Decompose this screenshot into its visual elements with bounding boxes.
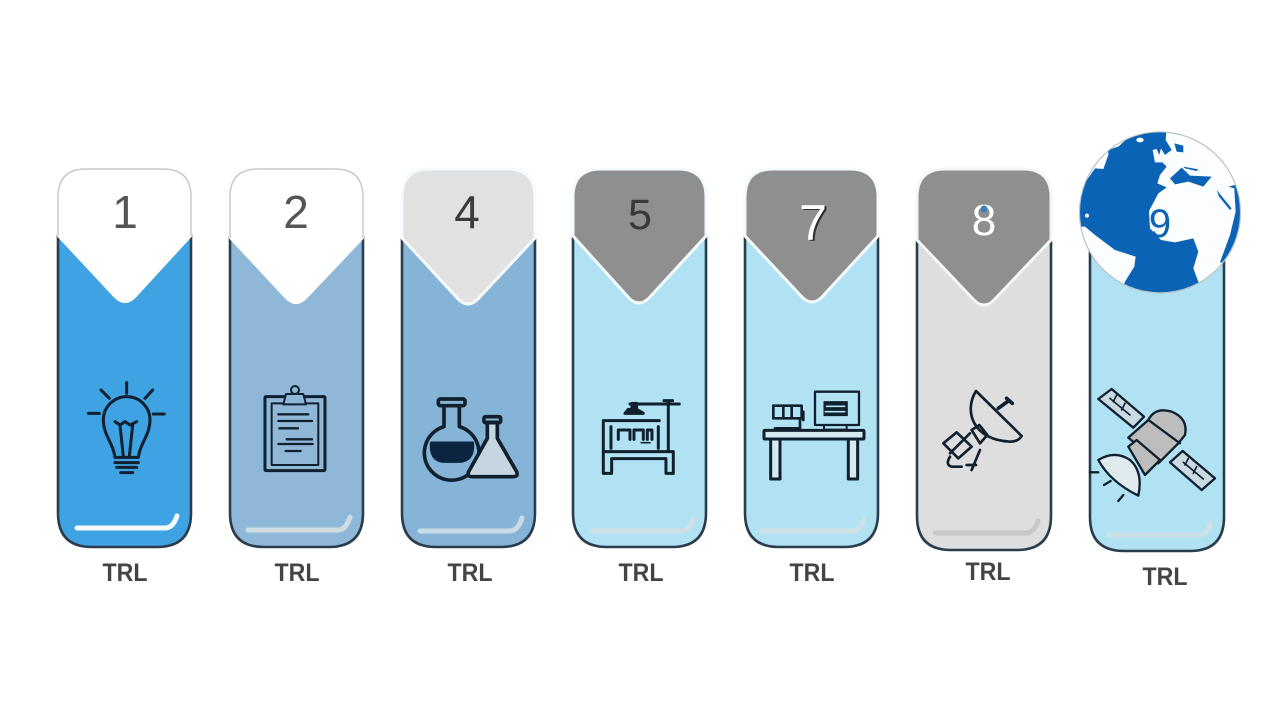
- card body: [745, 238, 878, 547]
- card body: [1090, 245, 1224, 551]
- icon: desk with computer: [764, 392, 864, 479]
- icon: flasks: [424, 399, 517, 480]
- card: TRL 8: [917, 169, 1051, 586]
- TRL infographic: [56, 131, 1242, 585]
- label: TRL: [790, 559, 834, 587]
- globe: [1075, 128, 1248, 298]
- card header: [917, 169, 1051, 305]
- number: 4: [454, 186, 480, 238]
- highlight: [420, 518, 522, 531]
- icon: lab bench: [603, 401, 679, 473]
- card: TRL 2: [230, 169, 363, 587]
- highlight: [935, 521, 1038, 533]
- card header: [402, 169, 535, 304]
- highlight: [592, 519, 693, 531]
- card body: [573, 238, 706, 547]
- icon: clipboard: [265, 386, 325, 471]
- number: 2: [283, 186, 309, 238]
- card body: [230, 238, 363, 547]
- label: TRL: [618, 559, 664, 587]
- land detail: [1085, 138, 1162, 218]
- highlight: [1108, 523, 1211, 535]
- number: 5: [628, 191, 652, 239]
- number: 8: [972, 196, 996, 245]
- icon: satellite dish: [943, 391, 1022, 470]
- card: TRL 7: [745, 169, 878, 587]
- number: 7: [801, 196, 829, 252]
- highlight: [248, 517, 350, 530]
- card: TRL 5: [573, 169, 706, 587]
- highlight: [762, 519, 864, 531]
- card body: [58, 236, 191, 547]
- label: TRL: [102, 559, 148, 587]
- label: TRL: [448, 559, 492, 587]
- card: TRL 9: [1090, 245, 1224, 591]
- card: TRL 7: 7: [799, 195, 827, 251]
- card body: [402, 238, 535, 547]
- card: TRL 4: [402, 169, 535, 587]
- icon: satellite: [1090, 389, 1215, 501]
- number: 1: [112, 186, 138, 238]
- card header: [745, 169, 878, 302]
- card header: [230, 169, 363, 303]
- highlight: [77, 516, 177, 528]
- label: TRL: [1142, 563, 1188, 591]
- icon: light bulb: [88, 383, 164, 473]
- card body: [917, 240, 1051, 550]
- card header: [58, 169, 191, 302]
- number: 9: [1149, 202, 1171, 246]
- card header: [573, 169, 706, 303]
- label: TRL: [274, 559, 320, 587]
- card: TRL 1: [58, 169, 191, 587]
- label: TRL: [966, 558, 1010, 586]
